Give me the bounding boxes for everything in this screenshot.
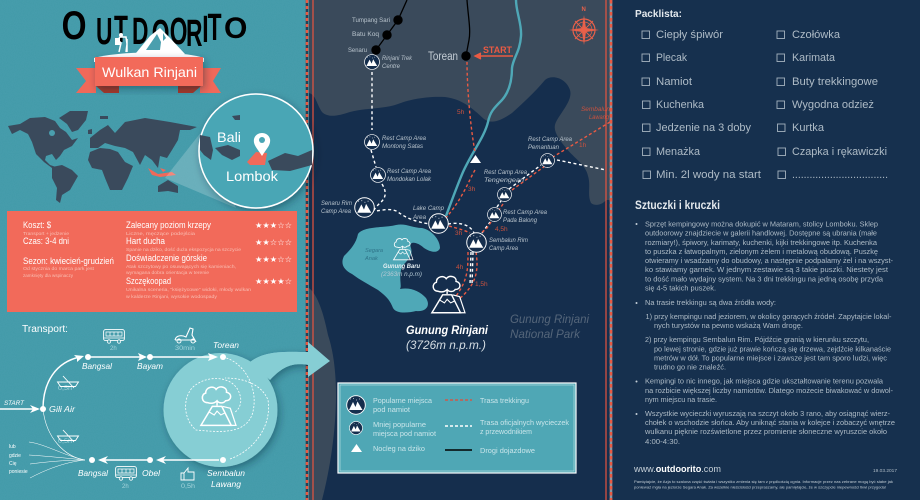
footer disclaimer: [634, 479, 893, 490]
map labels: Camp Area: [489, 245, 518, 252]
packing list: Ciepły śpiwór: [656, 29, 723, 41]
map labels: Pemantuan: [528, 144, 559, 151]
transport labels: 2h: [110, 346, 117, 352]
map labels: Senaru Rim: [321, 200, 352, 207]
text block: tips: 4:00-4:30.: [645, 439, 680, 446]
panel: trip facts: Szczękoopad: [126, 276, 171, 286]
text block: tips: Na trasie trekkingu są dwa źródła wody:: [645, 300, 776, 307]
transport labels: Bangsal: [82, 361, 113, 371]
map labels: (3726m n.p.m.): [406, 338, 486, 352]
map labels: Camp Area: [321, 208, 351, 215]
text block: tips: [636, 221, 895, 446]
ribbon: Wulkan Rinjani: [76, 57, 221, 93]
arrow: START pointer: [475, 53, 513, 59]
map labels: Mondokan Lolak: [387, 176, 432, 183]
map labels: 1,5h: [475, 281, 488, 288]
panel: trip facts: ★★★☆☆: [255, 221, 292, 230]
packing list: Karimata: [792, 52, 836, 64]
packing list: .................................: [792, 169, 888, 181]
map labels: Senaru: [348, 47, 367, 54]
map labels: Batu Koq: [352, 31, 379, 38]
transport labels: lub: [9, 444, 16, 450]
packing list: Menażka: [656, 146, 701, 158]
panel: trip facts: Atak szczytowy po osuwających się kamieniach,: [126, 264, 236, 270]
transport labels: Obel: [142, 468, 161, 478]
panel: left teal background: [0, 0, 309, 500]
map labels: Area: [412, 214, 426, 221]
text block: tips: Sprzęt kempingowy można dokupić w Mataram, stolicy Lomboku. Sklep: [645, 221, 878, 228]
logo: Outdoorito: [62, 3, 247, 54]
dashed panel dividers: [307, 0, 611, 500]
legend: Popularne miejsca: [373, 398, 432, 405]
panel: trip facts: Koszt: $: [23, 220, 51, 230]
text block: tips: po lewej stronie, gdzie już prawie kończą się drzewa, zejdźcie kilkanaście: [654, 346, 891, 354]
map labels: Tengengean: [484, 177, 524, 184]
map labels: 3h: [468, 186, 476, 193]
date: 19.03.2017: [873, 468, 898, 473]
transport labels: 0,5h: [181, 484, 195, 490]
inset map circle: Bali and Lombok: Bali: [217, 129, 241, 145]
icon: compass rose: N: [582, 7, 586, 13]
panel: right navy column: [612, 0, 920, 500]
legend: pod namiot: [373, 407, 410, 414]
map labels: Rest Camp Area: [382, 135, 426, 142]
text block: tips: Kempingi to nic innego, jak miejsca gdzie ukształtowanie terenu pozwala: [645, 379, 883, 386]
text block: tips: metrów w dół. To popularne miejsce i zawsze jest tam sporo ludzi, więc: [654, 356, 888, 362]
panel: trip facts: zamknięty dla wspinaczy: [23, 273, 74, 279]
transport routes: [0, 353, 226, 478]
legend: Nocleg na dziko: [373, 446, 425, 453]
transport labels: Torean: [213, 340, 239, 350]
transport labels: Lawang: [211, 479, 241, 489]
packing list: Kurtka: [792, 122, 825, 134]
map labels: Lake Camp: [413, 205, 444, 212]
icon: mountain and hiker: [94, 28, 204, 62]
map labels: Gunung Rinjani: [510, 312, 589, 326]
footer disclaimer: ponieważ mgła na jeziorze Segara Anak. Za wszelkie nieścisłości przepraszamy, ale pamiętajcie, że w szczypcie niepewności tkwi przygoda!: [634, 484, 886, 490]
map labels: Rest Camp Area: [387, 168, 431, 175]
zoom cone: [165, 126, 236, 208]
text block: tips: to puszka z łatwopalnym, zielonym żelem i metalową obudową. Puszkę: [645, 249, 878, 256]
map labels: Rest Camp Area: [484, 169, 527, 176]
icon: volcano in circle with dashed routes: [186, 357, 269, 459]
panel: trip facts: Doświadczenie górskie: [126, 253, 207, 263]
map labels: Torean: [428, 51, 458, 63]
transport labels: Sembalun: [207, 468, 245, 478]
inset map circle: Bali and Lombok: [199, 94, 313, 208]
text block: tips: na rozbicie większej liczby namiotów. Dlatego możecie biwakować w dowol-: [645, 388, 894, 395]
map borders: [313, 0, 606, 500]
panel: trip facts: Transport + jedzenie: [23, 231, 69, 237]
map labels: Gunung Baru: [383, 263, 420, 270]
panel: trip facts: Zalecany poziom krzepy: [126, 220, 211, 230]
map labels: Tumpang Sari: [352, 17, 390, 24]
map labels: 5h: [457, 109, 465, 116]
panel: trip facts: ★★☆☆☆: [255, 238, 292, 247]
logo: Outdoorito: UTDOORIT: [96, 6, 222, 54]
packing list: Kuchenka: [656, 99, 705, 111]
map labels: Lawang: [589, 114, 609, 121]
legend: Mniej popularne: [373, 422, 426, 429]
map labels: Pada Balong: [503, 217, 537, 224]
panel: trip facts: Hart ducha: [126, 236, 165, 246]
map labels: Sembalun Rim: [489, 237, 528, 244]
packing list: Buty trekkingowe: [792, 76, 878, 88]
map labels: Gunung Rinjani: [406, 323, 489, 337]
logo: Outdoorito: O: [224, 12, 247, 45]
tent: wild camp on the route: [470, 155, 481, 163]
map labels: Centre: [382, 63, 400, 70]
world map: [8, 111, 197, 203]
transport labels: 0,5h: [58, 386, 72, 392]
website: www.outdoorito.com: [633, 464, 721, 475]
map labels: Rinjani Trek: [382, 55, 413, 62]
panel: trip facts: Spanie na dziko, dość duża ekspozycja na szczycie: [126, 247, 241, 253]
roads: black access roads: [372, 0, 470, 60]
panel: trip facts: Unikalna sceneria, "księżycowe" widoki, młody wulkan: [126, 287, 251, 293]
packing list: Jedzenie na 3 doby: [656, 122, 751, 134]
legend: Trasa oficjalnych wycieczek: [480, 420, 570, 427]
transport labels: Cię: [9, 461, 17, 467]
map labels: 3h: [455, 230, 463, 237]
transport labels: 30min: [175, 346, 195, 352]
transport labels: gdzie: [9, 453, 21, 459]
panel: trekking map: [309, 0, 612, 500]
camp icons: [355, 55, 554, 252]
legend: Trasa trekkingu: [480, 398, 529, 405]
map labels: Rest Camp Area: [503, 209, 547, 216]
text block: tips: się 4-5 takich puszek.: [645, 286, 716, 293]
packing list: Min. 2l wody na start: [656, 169, 762, 181]
map labels: 4h: [456, 264, 464, 271]
packing list: Plecak: [656, 52, 687, 64]
map labels: Montong Satas: [382, 143, 424, 150]
transport labels: Bayam: [137, 361, 163, 371]
route: red trekking trail: [445, 62, 610, 300]
footer disclaimer: Pamiętajcie, że Azja to szalona część świata i wszystko zmienia się tam z prędkością ognia. Informacje przez nas zebrane mogą być słabe jak: [634, 479, 893, 484]
text block: tips: otwieramy i wsadzamy do obudowy, a następnie podpalamy żel i na wszyst-: [645, 258, 894, 265]
text block: tips: 1) przy kempingu nad jeziorem, w okolicy gorących źródeł. Zapytajcie lokal-: [646, 314, 892, 321]
icons: transport vehicles: [58, 328, 196, 480]
packing list: Czapka i rękawiczki: [792, 146, 887, 158]
text block: tips: to dość mało wydajny system. Na 3 dni trekkingu na jedną osobę przyda: [645, 277, 883, 284]
text block: tips: nym miejscu na trasie.: [645, 397, 717, 404]
legend: Drogi dojazdowe: [480, 448, 535, 455]
text block: tips: ko stawiamy garnek. W jednym zestawie są 3 takie puszki. Niestety jest: [645, 267, 888, 274]
map labels: National Park: [510, 327, 581, 341]
packing list: Namiot: [656, 76, 693, 88]
legend: z przewodnikiem: [480, 429, 532, 436]
volcano: Gunung Baru: [394, 238, 413, 260]
panel: trip facts: Liczne, męczące podejścia: [126, 231, 195, 237]
map labels: (2363m n.p.m): [381, 271, 422, 278]
map highlight: Indonesia: [148, 168, 176, 177]
arrow: into the map: [308, 342, 330, 377]
transport heading: Transport:: [22, 324, 68, 335]
transport labels: 2h: [122, 484, 129, 490]
text block: tips: chołek o wschodzie słońca. Aby uniknąć stania w kolejce i zobaczyć wnętrze: [645, 420, 895, 427]
panel: trip facts: [7, 211, 297, 312]
ribbon: Wulkan Rinjani: Wulkan Rinjani: [102, 64, 197, 80]
text block: tips: trudno go nie znaleźć.: [654, 365, 726, 372]
panel: trip facts: ★★★★☆: [255, 277, 292, 286]
label: Segara Anak: Anak: [364, 256, 379, 262]
panel: trip facts: Sezon: kwiecień-grudzień: [23, 256, 114, 266]
map labels: Rest Camp Area: [528, 136, 572, 143]
panel: trip facts: Czas: 3-4 dni: [23, 236, 69, 246]
transport labels: 0,5h: [58, 439, 72, 445]
heading: tips: Sztuczki i kruczki: [635, 200, 720, 212]
transport labels: Bangsal: [78, 468, 109, 478]
text block: tips: outdoorowy znajdziecie w galerii handlowej. Dostępne są ubrania (małe: [645, 231, 877, 238]
label: Segara Anak: Segara: [365, 248, 383, 254]
big circle with connecting arm: [164, 352, 309, 467]
inset map circle: Bali and Lombok: Lombok: [226, 168, 279, 184]
volcano: Gunung Rinjani: [432, 276, 465, 313]
map labels: 4,5h: [495, 226, 508, 233]
panel: trip facts: w kalderze Rinjani, wysokie wodospady: [126, 294, 218, 300]
legend: miejsca pod namiot: [373, 431, 436, 438]
map labels: 1h: [579, 142, 587, 149]
packing list: Czołówka: [792, 29, 841, 41]
text block: tips: Wszystkie wycieczki wyruszają na szczyt około 3 rano, aby osiągnąć wierz-: [645, 411, 891, 418]
icon: compass rose: [569, 7, 599, 45]
logo: Outdoorito: O: [62, 3, 87, 48]
text block: tips: wulkanu pięknie rozświetlone przez promienie słoneczne wyruszcie około: [644, 429, 887, 436]
lake Segara Anak: [342, 225, 440, 313]
panel: trip facts: ★★★☆☆: [255, 255, 292, 264]
transport labels: START: [4, 401, 25, 407]
packing list: [635, 8, 888, 181]
text block: tips: rozmiary!), śpiwory, karimaty, kuchenki, kijki trekkingowe itp. Kuchenka: [645, 240, 877, 247]
map labels: Sembalun: [581, 106, 610, 113]
river: [446, 0, 521, 216]
transport labels: Gili Air: [49, 404, 76, 414]
packing list: Wygodna odzież: [792, 99, 874, 111]
transport labels: [4, 340, 245, 490]
text block: tips: 2) przy kempingu Sembalun Rim. Pójdźcie granią w kierunku szczytu,: [645, 337, 869, 344]
panel: trip facts: Od stycznia do marca park jest: [23, 266, 95, 272]
packing list: Packlista:: [635, 8, 682, 20]
legend: [338, 383, 576, 473]
text block: tips: nych turystów na pewno wskażą Wam drogę.: [654, 323, 803, 330]
map labels: START: [483, 45, 512, 56]
panel: trip facts: wymagana dobra orientacja w terenie: [126, 270, 209, 276]
route: white guided trail: [371, 72, 606, 285]
map labels: [321, 17, 610, 352]
transport labels: poniesie: [9, 469, 28, 475]
